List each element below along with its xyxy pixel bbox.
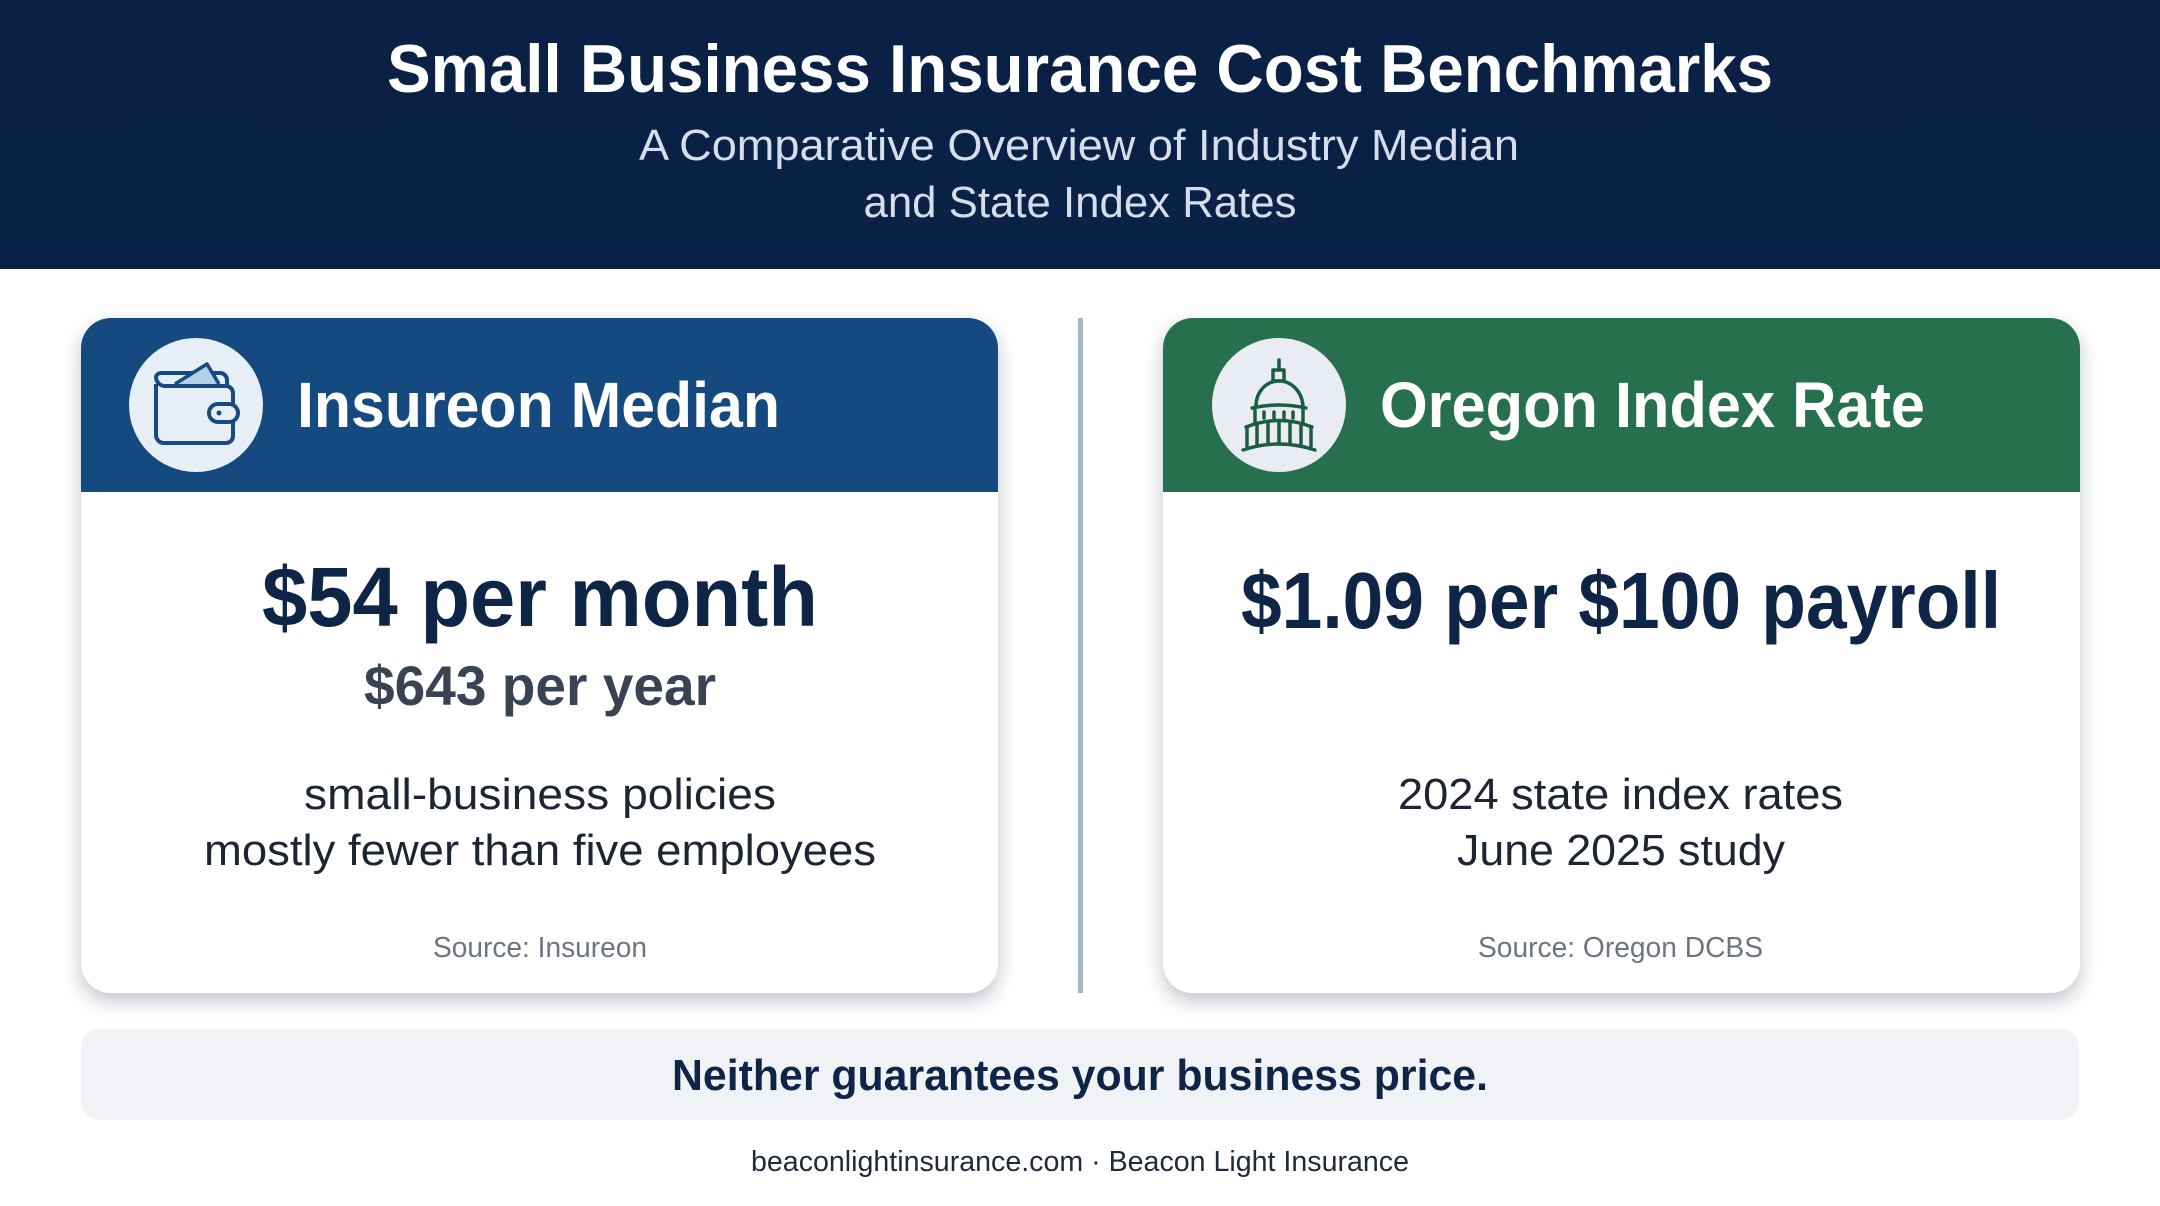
description: Oregon: [1398, 770, 1843, 875]
rate figure: $1.09 per $100 payroll: [1241, 556, 2001, 645]
icon: wallet: [129, 338, 263, 472]
callout text: Neither guarantees your business price.: [672, 1051, 1488, 1100]
source: Insureon: Source: Insureon: [433, 932, 647, 964]
panel header: Oregon: [1163, 318, 2080, 492]
center divider: [1078, 318, 1083, 993]
footer: beaconlightinsurance.com · Beacon Light Insurance: [751, 1146, 1409, 1178]
header banner: [0, 0, 2160, 269]
description: Insureon: mostly fewer than five employees: [204, 826, 876, 875]
panel heading: Oregon Index Rate: Oregon Index Rate: [1380, 369, 1925, 441]
panel header: Insureon: [81, 318, 998, 492]
panel heading: Insureon Median: Insureon Median: [297, 369, 780, 441]
title: Small Business Insurance Cost Benchmarks: [387, 31, 1773, 107]
description: Insureon: small-business policies: [304, 770, 776, 819]
yearly figure: $643 per year: [364, 654, 716, 717]
source: Oregon: Source: Oregon DCBS: [1478, 932, 1763, 964]
panel: Insureon Median: [81, 318, 998, 993]
panel: Oregon Index Rate: [1163, 318, 2080, 993]
icon: capitol building: [1212, 338, 1346, 472]
subtitle: A Comparative Overview of Industry Median: [639, 121, 1519, 170]
description: Oregon: 2024 state index rates: [1398, 770, 1843, 819]
callout bar: [81, 1029, 2079, 1120]
monthly figure: $54 per month: [262, 550, 818, 644]
description: Insureon: [204, 770, 876, 875]
subtitle: [639, 121, 1519, 227]
description: Oregon: June 2025 study: [1457, 826, 1785, 875]
subtitle: and State Index Rates: [864, 178, 1296, 227]
